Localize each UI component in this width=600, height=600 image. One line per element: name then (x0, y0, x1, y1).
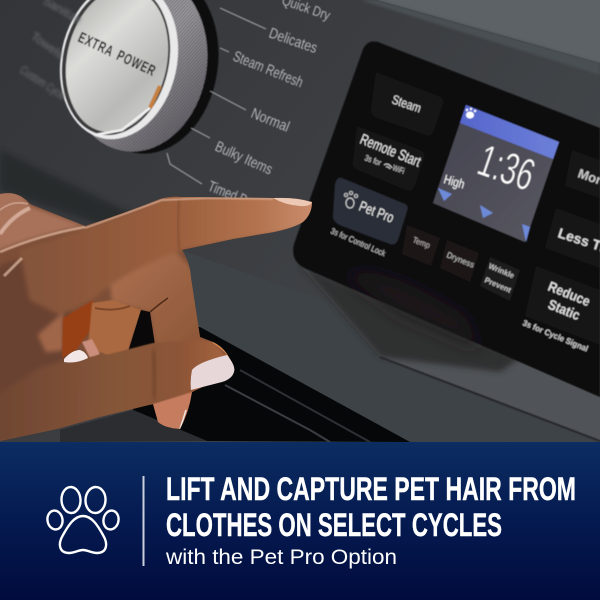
wrinkle prevent button: Prevent (483, 276, 513, 295)
pinky pink nail (82, 339, 100, 358)
temp button (402, 225, 440, 266)
bottom banner (0, 442, 600, 600)
reduce static button: 3s for Cycle Signal (521, 318, 590, 354)
red inner palm (62, 300, 93, 358)
wrinkle prevent button (480, 257, 520, 301)
dryness button: Dryness (445, 250, 476, 270)
knob label: EXTRA POWER (75, 29, 159, 80)
hand back highlights (0, 227, 85, 252)
thumb re-edge (89, 342, 212, 409)
temp button: Temp (411, 235, 432, 250)
cycle labels: Bulky Items (212, 138, 275, 178)
cycle labels (17, 0, 333, 213)
cycle labels: Timed Dry (206, 178, 259, 213)
index fingernail (273, 198, 312, 206)
reduce static button (521, 266, 600, 354)
reduce static button: Reduce (546, 278, 593, 309)
control lock hint: 3s for Control Lock (329, 226, 388, 259)
steam button: Steam (390, 92, 423, 116)
remote start button: WiFi (391, 162, 406, 176)
ring finger (88, 300, 141, 357)
cycle labels: Delicates (267, 25, 320, 57)
icon: wifi (384, 164, 392, 169)
icon: paw (46, 486, 120, 553)
steam button (371, 72, 443, 135)
dryness button (440, 240, 479, 282)
pet pro button (333, 178, 408, 244)
touch panel (293, 41, 600, 397)
cycle labels: Towels (28, 29, 66, 62)
gap between fingers (128, 310, 155, 352)
remote start button: Remote Start (358, 131, 424, 171)
subtitle: with the Pet Pro Option (165, 546, 397, 569)
curled finger nail (64, 350, 88, 362)
cycle labels: Normal (249, 105, 292, 136)
cycle knob (46, 0, 230, 163)
washer control panel background (0, 0, 600, 442)
pet pro button: Pet Pro (357, 199, 396, 227)
cycle labels: Steam Refresh (231, 48, 305, 91)
less time button (545, 208, 600, 268)
cycle labels: Custom Cycle (17, 63, 69, 103)
thumb nail (191, 355, 234, 390)
fingertip below thumb (150, 390, 194, 430)
display screen (433, 105, 559, 242)
reduce static button: Static (546, 296, 583, 323)
divider (142, 476, 144, 566)
hand pressing pet pro (0, 190, 320, 445)
more time button (565, 150, 600, 198)
wrinkle prevent button: Wrinkle (487, 262, 516, 281)
remote start button (353, 126, 424, 191)
blended skin tones (0, 190, 320, 445)
remote start button: 3s for (363, 152, 383, 168)
display screen: High (442, 171, 466, 192)
display screen: 1:36 (472, 134, 541, 201)
